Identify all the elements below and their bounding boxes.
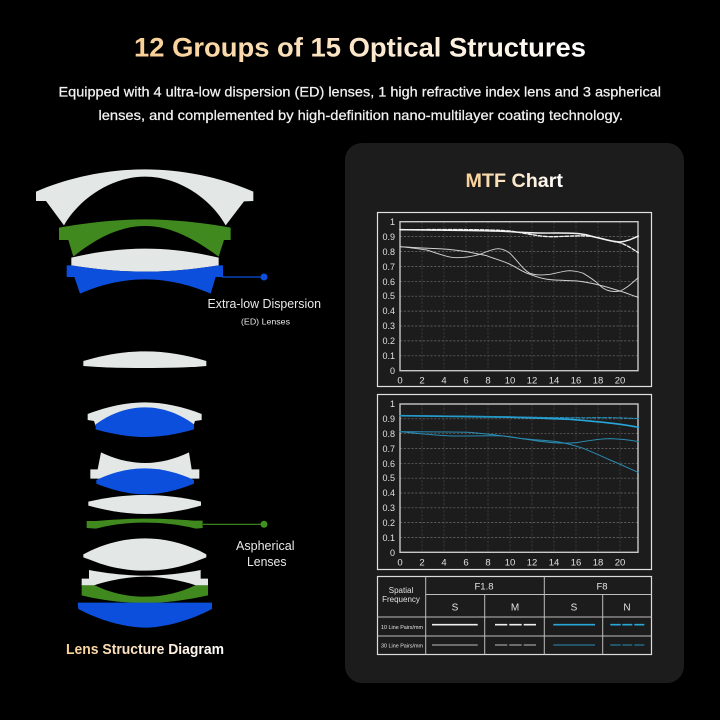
table headers: M (511, 602, 519, 614)
lens: white biconvex thin (88, 495, 201, 514)
x axis labels: 14 (549, 376, 559, 386)
x axis labels: 8 (485, 376, 491, 386)
aspherical label: Lenses (247, 555, 286, 569)
table headers: Frequency (382, 595, 420, 604)
x axis labels (397, 558, 625, 568)
y axis labels: 0.9 (382, 414, 395, 424)
y axis labels: 0.4 (382, 488, 395, 498)
x axis labels: 20 (615, 558, 625, 568)
lens: white cap over blue (88, 402, 202, 426)
y axis labels: 0.4 (382, 306, 395, 316)
lens: blue biconvex lower (96, 468, 194, 494)
y axis labels: 0 (390, 548, 395, 558)
y axis labels: 1 (390, 217, 395, 227)
table headers: N (623, 602, 631, 614)
y axis labels: 0.1 (382, 351, 395, 361)
x axis labels: 4 (441, 376, 447, 386)
y axis labels: 0.1 (382, 533, 395, 543)
table headers: F8 (596, 582, 608, 592)
y axis labels: 1 (390, 399, 395, 409)
curves (400, 230, 638, 297)
intro text: lenses, and complemented by high-definition nano-multilayer coating technology. (98, 107, 623, 123)
y axis labels: 0 (390, 366, 395, 376)
legend table (378, 576, 652, 654)
title: 12 Groups of 15 Optical Structures (134, 32, 586, 62)
intro text (58, 84, 661, 123)
panel heading: MTF Chart (466, 171, 564, 192)
lens diagram caption: Lens Structure Diagram (66, 642, 224, 658)
x axis labels: 6 (463, 376, 469, 386)
ED label: (ED) Lenses (241, 316, 290, 326)
lens: white concave (90, 452, 199, 482)
panel: MTF chart (345, 143, 684, 683)
table headers: S (571, 602, 578, 614)
aspherical label (236, 539, 294, 569)
chart: F8 MTF (378, 394, 652, 570)
table headers (382, 582, 631, 614)
x axis labels: 2 (419, 376, 425, 386)
x axis labels: 16 (571, 558, 581, 568)
table row labels: 10 Line Pairs/mm (381, 625, 423, 631)
x axis labels: 12 (527, 376, 537, 386)
y axis labels: 0.5 (382, 473, 395, 483)
chart: F1.8 MTF (378, 212, 652, 386)
x axis labels: 10 (505, 376, 515, 386)
x axis labels: 6 (463, 558, 469, 568)
table headers: F1.8 (474, 582, 494, 592)
lens: white concave doublet (82, 570, 208, 585)
y axis labels: 0.8 (382, 247, 395, 257)
table headers: Spatial (389, 586, 413, 595)
lens structure diagram: upper group (36, 169, 253, 294)
y axis labels: 0.7 (382, 262, 395, 272)
x axis labels: 20 (615, 376, 625, 386)
x axis labels: 0 (397, 376, 403, 386)
lens: white plano-convex (83, 351, 206, 368)
x axis labels: 2 (419, 558, 425, 568)
lens: green doublet (82, 585, 208, 603)
y axis labels (382, 399, 395, 558)
y axis labels: 0.9 (382, 232, 395, 242)
lens: large blue plano-convex (78, 603, 212, 628)
y axis labels: 0.7 (382, 444, 395, 454)
x axis labels: 18 (593, 376, 603, 386)
aspherical label: Aspherical (236, 539, 294, 553)
y axis labels: 0.8 (382, 429, 395, 439)
lens: thin green aspherical (87, 519, 203, 529)
table row labels: 30 Line Pairs/mm (381, 644, 423, 650)
lens: blue biconvex (96, 407, 194, 437)
lens: white biconvex (71, 249, 219, 272)
y axis labels: 0.5 (382, 291, 395, 301)
lens: green meniscus (59, 219, 231, 257)
x axis labels: 10 (505, 558, 515, 568)
x axis labels (397, 376, 625, 386)
x axis labels: 0 (397, 558, 403, 568)
y axis labels: 0.3 (382, 503, 395, 513)
curves (400, 416, 638, 472)
lens: blue ED element (67, 265, 223, 294)
lens structure diagram: middle group (83, 351, 206, 514)
x axis labels: 12 (527, 558, 537, 568)
lens: large white meniscus (36, 169, 253, 225)
x axis labels: 16 (571, 376, 581, 386)
y axis labels (382, 217, 395, 376)
lens structure diagram: lower group (78, 519, 212, 628)
table row labels (381, 625, 423, 650)
x axis labels: 8 (485, 558, 491, 568)
table headers: S (452, 602, 459, 614)
ED label: Extra-low Dispersion (208, 297, 321, 311)
x axis labels: 4 (441, 558, 447, 568)
lens: white biconvex flanged (83, 538, 206, 571)
y axis labels: 0.3 (382, 321, 395, 331)
x axis labels: 18 (593, 558, 603, 568)
aspherical leader line (203, 521, 268, 528)
y axis labels: 0.2 (382, 518, 395, 528)
ED leader line (222, 274, 268, 280)
ED label (208, 297, 321, 326)
y axis labels: 0.6 (382, 277, 395, 287)
x axis labels: 14 (549, 558, 559, 568)
y axis labels: 0.2 (382, 336, 395, 346)
legend line samples (432, 625, 644, 645)
intro text: Equipped with 4 ultra-low dispersion (ED) lenses, 1 high refractive index lens and 3 aspherical (58, 84, 661, 100)
y axis labels: 0.6 (382, 459, 395, 469)
